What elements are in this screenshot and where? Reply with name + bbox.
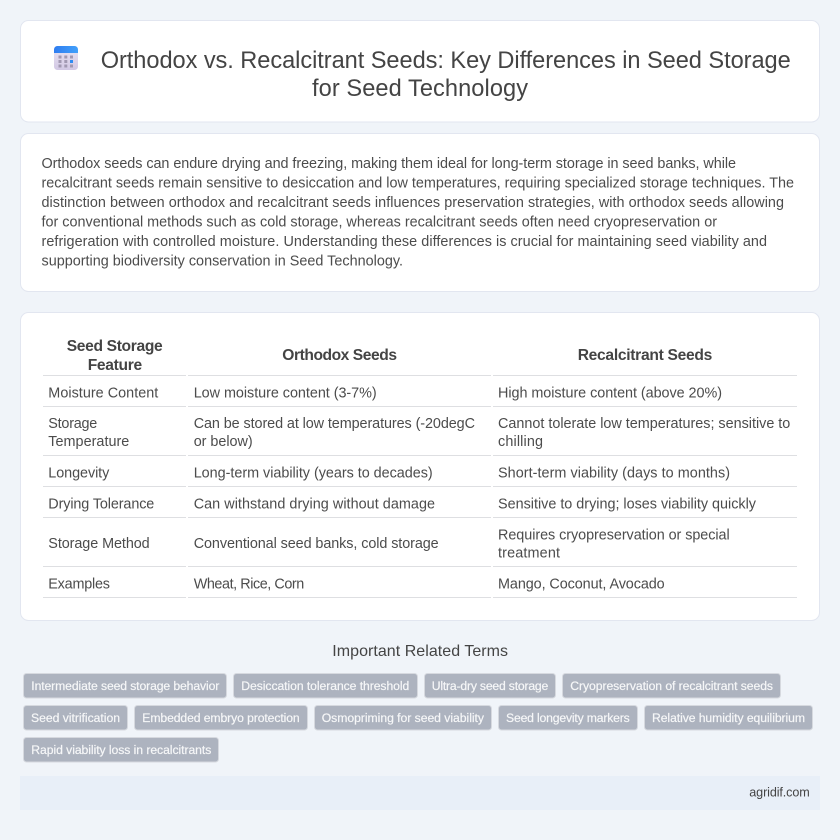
tag group: related terms [24,674,812,762]
tag: relative humidity equilibrium: Relative humidity equilibrium [652,711,805,725]
text block: introduction paragraph [42,156,794,269]
table row: examples: Wheat, Rice, Corn [194,576,304,592]
table row: moisture content [48,385,722,401]
icon: calendar [54,46,78,70]
text block: introduction paragraph: distinction between orthodox and recalcitrant seeds influences preservation strategies, with orthodox seeds allowing [42,195,784,211]
footer bar [20,776,820,810]
tag: embedded embryo protection: Embedded embryo protection [142,711,300,725]
text block: introduction paragraph: refrigeration with controlled moisture. Understanding these differences is crucial for maintaining seed viability and [42,234,767,250]
table row: examples: Examples [48,576,110,592]
table row: drying tolerance: Sensitive to drying; loses viability quickly [498,496,757,512]
tag: desiccation tolerance threshold: Desiccation tolerance threshold [241,679,409,693]
title: Orthodox vs. Recalcitrant Seeds: Key Differences in Seed Storage [101,48,791,74]
panel: header [20,20,820,122]
tag: intermediate seed storage behavior: Intermediate seed storage behavior [31,679,219,693]
table row: moisture content: High moisture content (above 20%) [498,385,722,401]
table row: storage method: Conventional seed banks, cold storage [194,536,439,552]
table row: longevity [48,465,730,481]
table header row: Feature [88,357,143,374]
table row: longevity: Short-term viability (days to months) [498,465,730,481]
table row: storage method: Storage Method [48,536,150,552]
panel: introduction [20,134,820,292]
tag: ultra-dry seed storage: Ultra-dry seed storage [432,679,549,693]
table row: storage temperature: or below) [194,434,253,450]
table row: storage temperature: Cannot tolerate low temperatures; sensitive to [498,416,790,432]
title: for Seed Technology [312,76,528,102]
tag: seed longevity markers: Seed longevity markers [506,711,630,725]
text block: introduction paragraph: supporting biodiversity conservation in Seed Technology. [42,253,403,269]
table header row: Orthodox Seeds [282,347,397,364]
footer source text: agridif.com [749,786,810,800]
table row: drying tolerance: Drying Tolerance [48,496,154,512]
table row: drying tolerance: Can withstand drying without damage [194,496,435,512]
table row: storage temperature [48,416,790,450]
table row: longevity: Long-term viability (years to decades) [194,465,433,481]
table row: examples: Mango, Coconut, Avocado [498,576,665,592]
table row: storage method [48,527,730,561]
tag: embedded embryo protection [134,706,308,730]
table row: moisture content: Low moisture content (3-7%) [194,385,377,401]
table row: storage temperature: Temperature [48,434,129,450]
table header row: Seed Storage [67,338,163,355]
tag: relative humidity equilibrium [644,706,812,730]
tag: cryopreservation of recalcitrant seeds: Cryopreservation of recalcitrant seeds [570,679,773,693]
tag: osmopriming for seed viability: Osmopriming for seed viability [322,711,485,725]
tag: desiccation tolerance threshold [234,674,418,698]
table row: longevity: Longevity [48,465,110,481]
table row: storage temperature: chilling [498,434,543,450]
tag: rapid viability loss in recalcitrants [24,738,218,762]
text block: introduction paragraph: Orthodox seeds can endure drying and freezing, making them ideal for long-term storage in seed banks, while [42,156,736,172]
table row: drying tolerance [48,496,757,512]
table row: storage method: Requires cryopreservation or special [498,527,730,543]
table row: storage temperature: Storage [48,416,97,432]
tag: seed vitrification: Seed vitrification [31,711,120,725]
text block: introduction paragraph: recalcitrant seeds remain sensitive to desiccation and low temperatures, requiring specialized storage techniques. The [42,175,794,191]
heading: important related terms: Important Related Terms [332,643,508,660]
title [101,48,791,102]
panel: comparison table [20,312,820,620]
table row: storage temperature: Can be stored at low temperatures (-20degC [194,416,475,432]
tag: cryopreservation of recalcitrant seeds [562,674,780,698]
tag: seed longevity markers [498,706,638,730]
table row: moisture content: Moisture Content [48,385,158,401]
tag: intermediate seed storage behavior [24,674,226,698]
text block: introduction paragraph: for conventional methods such as cold storage, whereas recalcitrant seeds often need cryopreservation or [42,214,717,230]
tag: seed vitrification [24,706,128,730]
table header row [67,338,713,374]
table row: examples [48,576,665,592]
tag: osmopriming for seed viability [314,706,492,730]
table header row: Recalcitrant Seeds [578,347,713,364]
tag: ultra-dry seed storage [424,674,556,698]
table row: storage method: treatment [498,545,560,561]
tag: rapid viability loss in recalcitrants: Rapid viability loss in recalcitrants [31,743,211,757]
